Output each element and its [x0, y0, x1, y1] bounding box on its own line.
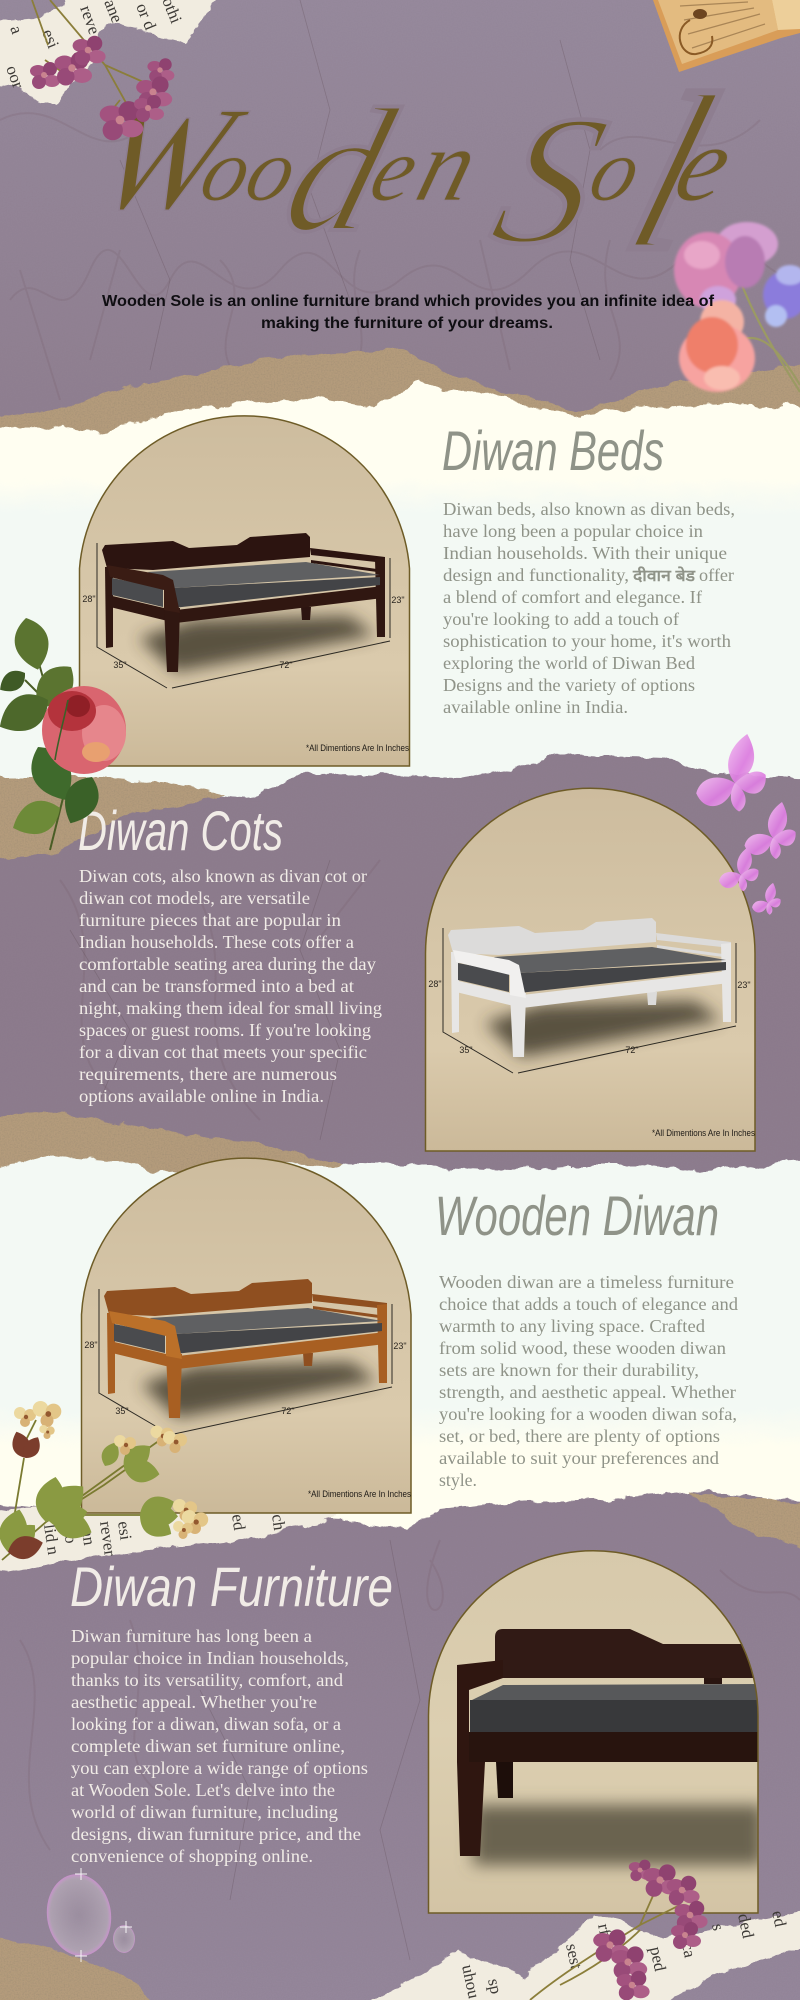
torn band: tan corner right [689, 1492, 800, 1552]
dimension labels: 72" [279, 660, 293, 670]
body copy: choice that adds a touch of elegance and [439, 1294, 738, 1314]
body copy: and can be transformed into a bed at [79, 976, 354, 996]
rose bloom [42, 686, 126, 774]
panel: Wooden Diwan arch photo [82, 1158, 411, 1513]
torn paper: newspaper strip bottom right: s [708, 1922, 728, 1932]
body copy: exploring the world of Diwan Bed [443, 653, 695, 673]
body copy: at Wooden Sole. Let's delve into the [71, 1780, 335, 1800]
body copy [439, 1272, 738, 1490]
panel: Diwan Cots text [78, 799, 382, 1106]
body copy: Diwan beds, also known as divan beds, [443, 499, 735, 519]
close-up dark diwan [457, 1629, 768, 1865]
dimension labels [428, 979, 755, 1139]
panel: Diwan Furniture arch photo [428, 1551, 768, 1913]
body copy [79, 866, 382, 1106]
body copy: convenience of shopping online. [71, 1846, 313, 1866]
body copy: night, making them ideal for small living [79, 998, 382, 1018]
dimension labels: *All Dimentions Are In Inches [308, 1489, 411, 1500]
body copy: Diwan cots, also known as divan cot or [79, 866, 367, 886]
torn paper: newspaper strip bottom right: ded [734, 1912, 758, 1940]
torn paper: newspaper strip bottom right: ped [646, 1945, 670, 1973]
dimension labels: 28" [82, 594, 96, 604]
title: oo [190, 120, 309, 220]
intro text: making the furniture of your dreams. [261, 315, 553, 332]
torn paper: top-left newspaper strip: reve [76, 3, 104, 37]
body copy: you can explore a wide range of options [71, 1758, 368, 1778]
icon: soap bubbles [42, 1868, 135, 1962]
body copy: Indian households. These cots offer a [79, 932, 354, 952]
panel: Wooden Diwan text [435, 1184, 738, 1490]
panel: Diwan Furniture text [70, 1555, 393, 1866]
torn paper: newspaper strip under third arch: esi [114, 1520, 136, 1542]
body copy: thanks to its versatility, comfort, and [71, 1670, 343, 1690]
body copy: sets are known for their durability, [439, 1360, 699, 1380]
title: d [266, 72, 413, 269]
body copy: Designs and the variety of options [443, 675, 695, 695]
panel: Diwan Beds arch photo [80, 416, 410, 766]
panel: Diwan Cots arch photo [426, 788, 755, 1151]
torn paper: newspaper strip under third arch: lid n [40, 1523, 63, 1556]
honey wood diwan [99, 1279, 392, 1434]
body copy: you're looking to add a touch of [443, 609, 679, 629]
body copy: available to suit your preferences and [439, 1448, 719, 1468]
body copy: Wooden diwan are a timeless furniture [439, 1272, 734, 1292]
dimension labels: 23" [391, 595, 405, 605]
blue bloom [763, 265, 800, 327]
torn paper: newspaper strip under third arch [0, 1508, 357, 1572]
reddish sepals [5, 1429, 46, 1563]
body copy: options available online in India. [79, 1086, 324, 1106]
body copy: furniture pieces that are popular in [79, 910, 341, 930]
torn paper: top-left newspaper strip [0, 0, 227, 107]
white diwan [443, 918, 736, 1073]
dimension labels: 28" [428, 979, 442, 989]
torn paper: newspaper strip under third arch: an [78, 1528, 99, 1547]
pink bloom [674, 222, 778, 314]
panel: Diwan Beds text [442, 419, 735, 717]
dimension labels: 23" [393, 1341, 407, 1351]
title: e [360, 119, 430, 221]
torn paper: newspaper strip under third arch: rf [12, 1527, 33, 1542]
intro text [102, 293, 715, 332]
body copy: available online in India. [443, 697, 628, 717]
heading: Diwan Furniture [70, 1555, 393, 1618]
body copy: popular choice in Indian households, [71, 1648, 349, 1668]
dimension labels: 72" [625, 1045, 639, 1055]
torn paper: top-left newspaper strip: esi [38, 26, 63, 51]
dimension labels: 35" [459, 1045, 473, 1055]
title [62, 47, 762, 297]
icon: dried yellow flower bottom-left [0, 1401, 208, 1563]
torn band: tan layer above third section [0, 1110, 352, 1180]
body copy: a blend of comfort and elegance. If [443, 587, 702, 607]
dimension labels: 28" [84, 1340, 98, 1350]
body copy: Diwan furniture has long been a [71, 1626, 312, 1646]
heading: Diwan Beds [442, 419, 664, 482]
title: n [406, 107, 491, 223]
torn paper: newspaper strip bottom right: sp [484, 1977, 506, 1996]
title: o [579, 120, 653, 220]
torn band: white paper section three [0, 1155, 800, 1532]
title: S [474, 77, 626, 282]
torn paper: newspaper strip under third arch: rever [96, 1520, 120, 1557]
body copy: spaces or guest rooms. If you're looking [79, 1020, 371, 1040]
torn paper: newspaper strip under third arch: ed [228, 1513, 249, 1532]
body copy: from solid wood, these wooden diwan [439, 1338, 726, 1358]
body copy [71, 1626, 368, 1866]
body copy: for a divan cot that meets your specific [79, 1042, 367, 1062]
torn paper: newspaper strip bottom right: uhou [458, 1963, 484, 2000]
dimension labels: 23" [737, 980, 751, 990]
dimension labels: 35" [115, 1406, 129, 1416]
title: W [78, 76, 261, 240]
dimension labels: *All Dimentions Are In Inches [652, 1128, 755, 1139]
body copy: design and functionality, [443, 565, 629, 585]
dimension labels: 35" [113, 660, 127, 670]
heading: Diwan Cots [78, 799, 283, 862]
body copy: strength, and aesthetic appeal. Whether [439, 1382, 736, 1402]
title: l [604, 47, 738, 297]
body copy: aesthetic appeal. Whether you're [71, 1692, 317, 1712]
body copy: requirements, there are numerous [79, 1064, 337, 1084]
torn paper: top-left newspaper strip: oor [2, 63, 28, 91]
body copy: Indian households. With their unique [443, 543, 727, 563]
dark walnut diwan [97, 533, 390, 688]
body copy: diwan cot models, are versatile [79, 888, 310, 908]
body copy: world of diwan furniture, including [71, 1802, 338, 1822]
body copy: warmth to any living space. Crafted [439, 1316, 705, 1336]
dimension labels: 72" [281, 1406, 295, 1416]
torn paper: newspaper strip under third arch: ch [268, 1513, 289, 1532]
body copy: complete diwan set furniture online, [71, 1736, 345, 1756]
icon: rose with leaves left [0, 614, 126, 850]
body copy: have long been a popular choice in [443, 521, 703, 541]
icon: open book, top right [653, 0, 800, 72]
body copy [443, 499, 735, 717]
coral bloom [679, 300, 755, 392]
icon: watercolor flowers right [674, 222, 800, 392]
torn paper: top-left newspaper strip: a [6, 23, 27, 37]
torn band: tan layer above first section [0, 348, 800, 440]
body copy: comfortable seating area during the day [79, 954, 376, 974]
body copy: looking for a diwan, diwan sofa, or a [71, 1714, 341, 1734]
torn paper: tan corner bottom-left [0, 1937, 168, 2000]
body copy: you're looking for a wooden diwan sofa, [439, 1404, 737, 1424]
dimension labels [84, 1340, 411, 1500]
torn paper: newspaper strip bottom right: ed [768, 1909, 790, 1929]
torn band: tan layer left of second section [0, 777, 225, 858]
torn paper: newspaper strip bottom right [352, 1908, 800, 2000]
icon: pink butterflies right [696, 734, 796, 915]
intro text: Wooden Sole is an online furniture brand which provides you an infinite idea of [102, 293, 715, 310]
body copy: style. [439, 1470, 477, 1490]
torn paper: top-left newspaper strip: or d [132, 0, 160, 33]
dimension labels: *All Dimentions Are In Inches [306, 743, 409, 754]
icon: pressed pink flower top left [30, 0, 174, 140]
title: e [663, 104, 745, 224]
body copy: set, or bed, there are plenty of options [439, 1426, 720, 1446]
torn paper: newspaper strip under third arch: fo [60, 1528, 81, 1545]
torn paper: newspaper strip bottom right: sest [562, 1942, 586, 1971]
body copy: sophistication to your home, it's worth [443, 631, 731, 651]
icon: pressed pink flower bottom right [530, 1860, 708, 2000]
torn paper: newspaper strip bottom right: t ca [676, 1932, 700, 1960]
dimension labels [82, 594, 409, 754]
torn band: white paper section one [0, 383, 800, 853]
body copy: designs, diwan furniture price, and the [71, 1824, 361, 1844]
body copy: दीवान बेड [632, 566, 697, 585]
body copy: offer [699, 565, 734, 585]
torn paper: newspaper strip bottom right: rfu [594, 1922, 617, 1946]
